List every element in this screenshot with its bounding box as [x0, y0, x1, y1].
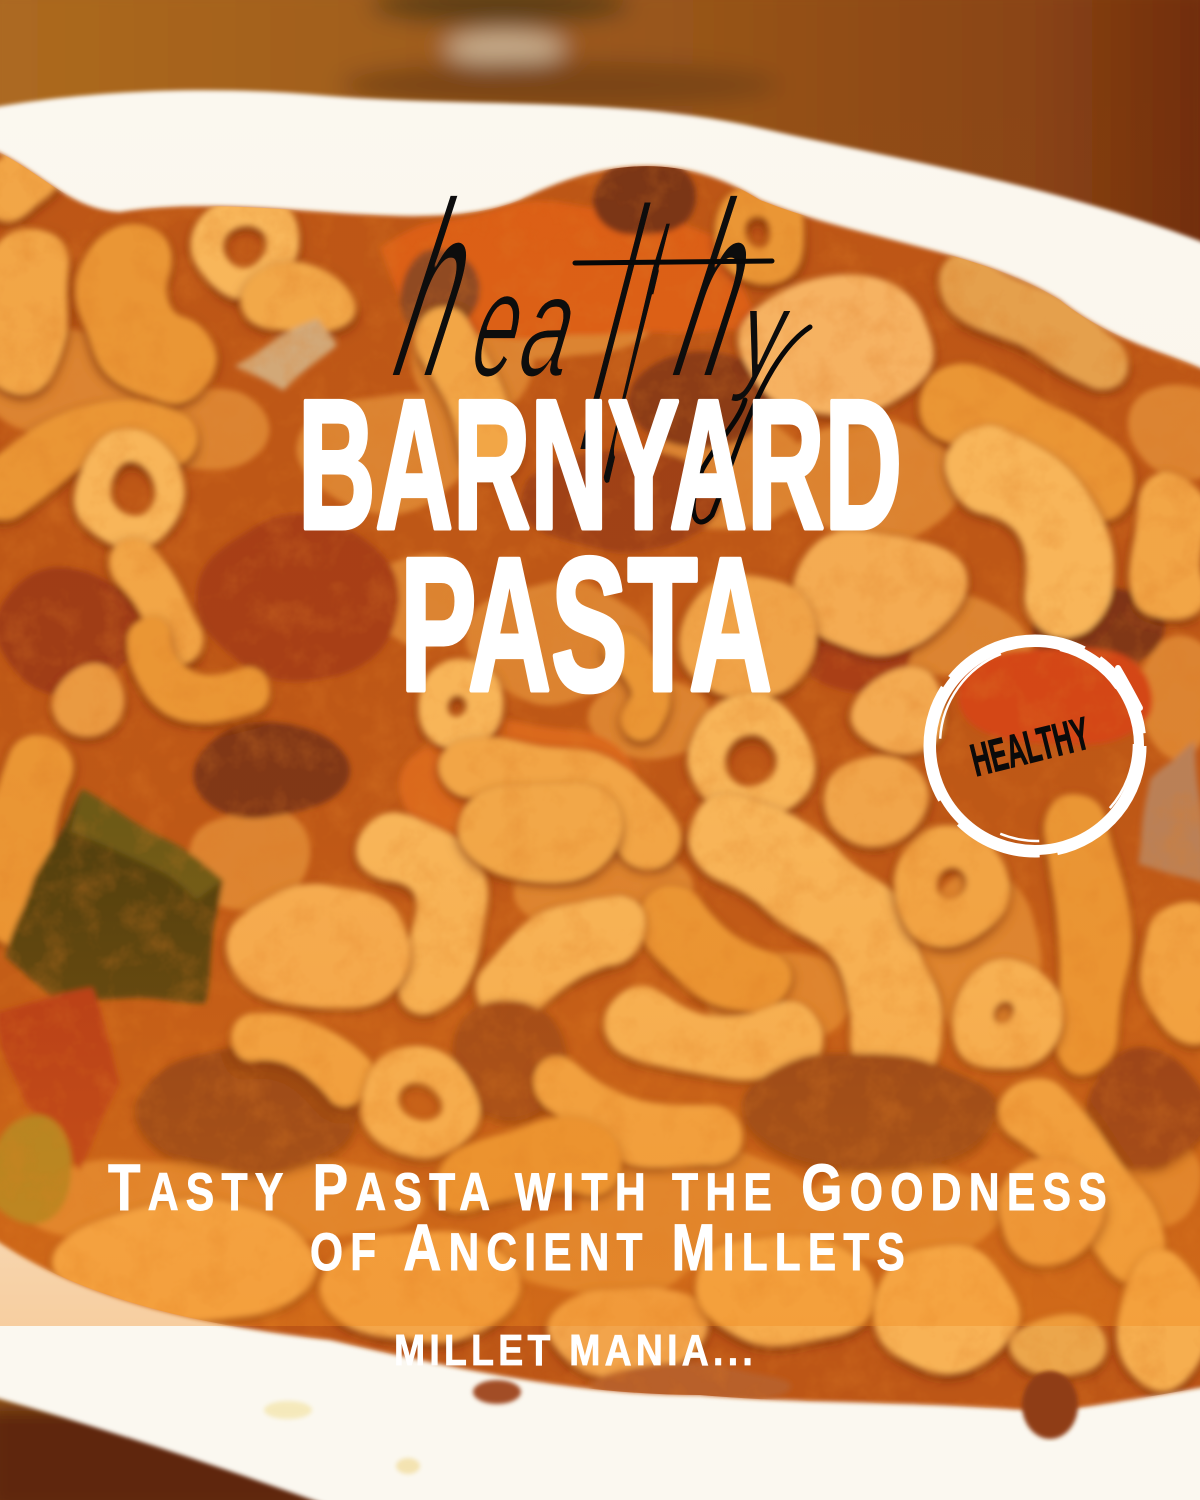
- macaroni pieces: [10, 170, 30, 190]
- script title: healthy: h: [377, 151, 499, 430]
- badge: healthy brush ring: HEALTHY: [966, 707, 1095, 786]
- badge: healthy brush ring: [925, 636, 1145, 856]
- meat specks on plate: [473, 1371, 1078, 1439]
- footer label: MILLET MANIA...: [394, 1326, 757, 1375]
- script title: healthy: e: [462, 240, 536, 408]
- plate stains: [264, 1401, 420, 1474]
- subtitle: OF ANCIENT MILLETS: [310, 1210, 912, 1284]
- script title: healthy: a: [511, 244, 588, 407]
- under layer: [0, 260, 1200, 1290]
- script title: healthy: y: [730, 263, 797, 403]
- script title: healthy: l: [562, 141, 665, 524]
- script title: healthy: h: [657, 151, 779, 430]
- subtitle: [108, 1150, 1114, 1284]
- script title: healthy: [377, 121, 810, 565]
- subtitle: TASTY PASTA WITH THE GOODNESS: [108, 1150, 1114, 1224]
- script title: healthy: t: [578, 121, 699, 565]
- title: PASTA: PASTA: [400, 519, 772, 731]
